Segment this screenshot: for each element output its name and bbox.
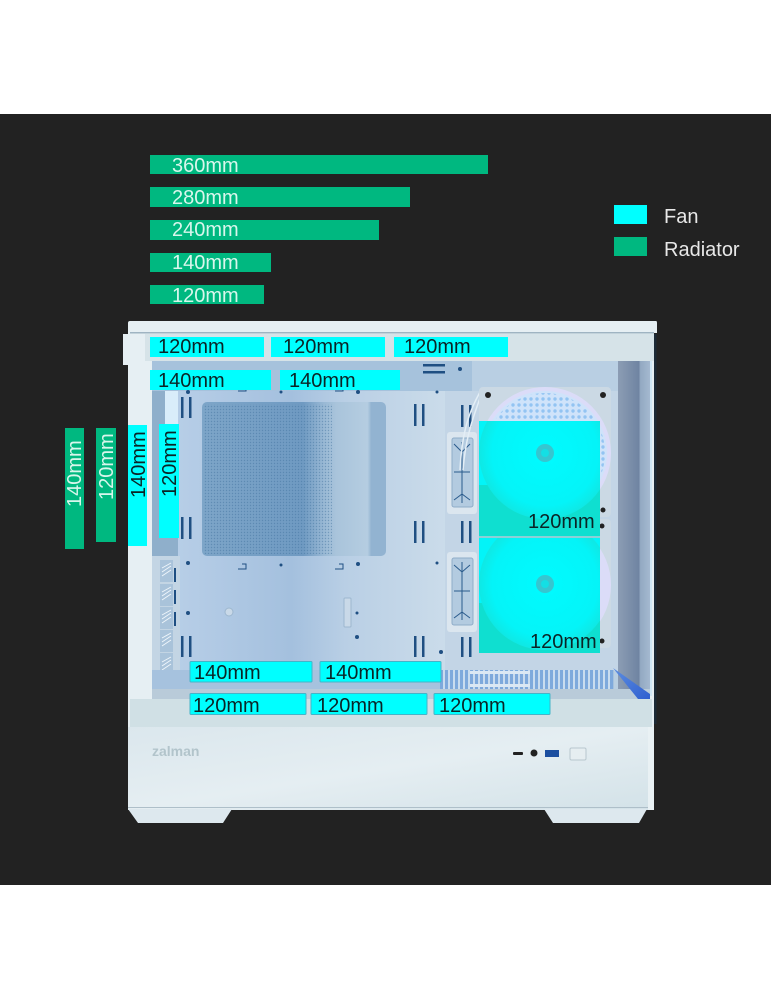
motherboard tray xyxy=(178,391,448,670)
legend: Radiator xyxy=(664,239,740,261)
dark background panel xyxy=(0,114,771,885)
rear and side vertical labels xyxy=(64,424,181,549)
radiator size bars: 140mm xyxy=(172,252,239,274)
rear and side vertical labels: 120mm xyxy=(96,433,118,500)
PCI slots xyxy=(152,556,180,682)
fan overlay upper xyxy=(479,421,600,519)
feet xyxy=(128,809,232,823)
fan size labels: 120mm xyxy=(528,511,595,533)
bottom mount labels: 120mm xyxy=(317,695,384,717)
top mount labels: 140mm xyxy=(158,370,225,392)
lower front fascia xyxy=(130,699,652,727)
mesh cutout xyxy=(202,402,386,556)
radiator size bars: 240mm xyxy=(172,219,239,241)
top mount labels: 120mm xyxy=(158,336,225,358)
bottom mount labels: 120mm xyxy=(439,695,506,717)
top mount labels: 140mm xyxy=(289,370,356,392)
bottom mount labels: 120mm xyxy=(193,695,260,717)
fan overlay lower xyxy=(479,538,600,650)
right glass strip xyxy=(618,361,650,696)
logo: zalman xyxy=(152,743,199,759)
fan size labels: 120mm xyxy=(530,631,597,653)
radiator size bars xyxy=(150,155,488,307)
lower floor vents xyxy=(152,668,650,699)
top mount labels xyxy=(150,336,508,392)
front I/O ports xyxy=(513,748,586,760)
rear and side vertical labels: 140mm xyxy=(128,431,150,498)
top mount labels: 120mm xyxy=(404,336,471,358)
interior window xyxy=(152,361,650,699)
tray standoff and bracket xyxy=(225,598,351,627)
cable grommets xyxy=(447,392,480,632)
case body xyxy=(123,321,657,809)
upper left rear opening xyxy=(152,391,180,561)
rear and side vertical labels: 140mm xyxy=(64,440,86,507)
fan and radiator bracket, right xyxy=(479,387,611,653)
tray slots xyxy=(181,364,472,657)
bottom mount labels: 140mm xyxy=(325,662,392,684)
radiator overlay xyxy=(479,421,600,653)
fan size labels xyxy=(528,511,597,653)
rear and side vertical labels: 120mm xyxy=(159,430,181,497)
legend: Fan xyxy=(664,206,698,228)
bottom mount labels xyxy=(190,662,550,717)
radiator size bars: 280mm xyxy=(172,187,239,209)
radiator size bars: 120mm xyxy=(172,285,239,307)
legend xyxy=(614,205,740,261)
PC case illustration xyxy=(123,321,657,823)
radiator size bars: 360mm xyxy=(172,155,239,177)
top mount labels: 120mm xyxy=(283,336,350,358)
bottom mount labels: 140mm xyxy=(194,662,261,684)
